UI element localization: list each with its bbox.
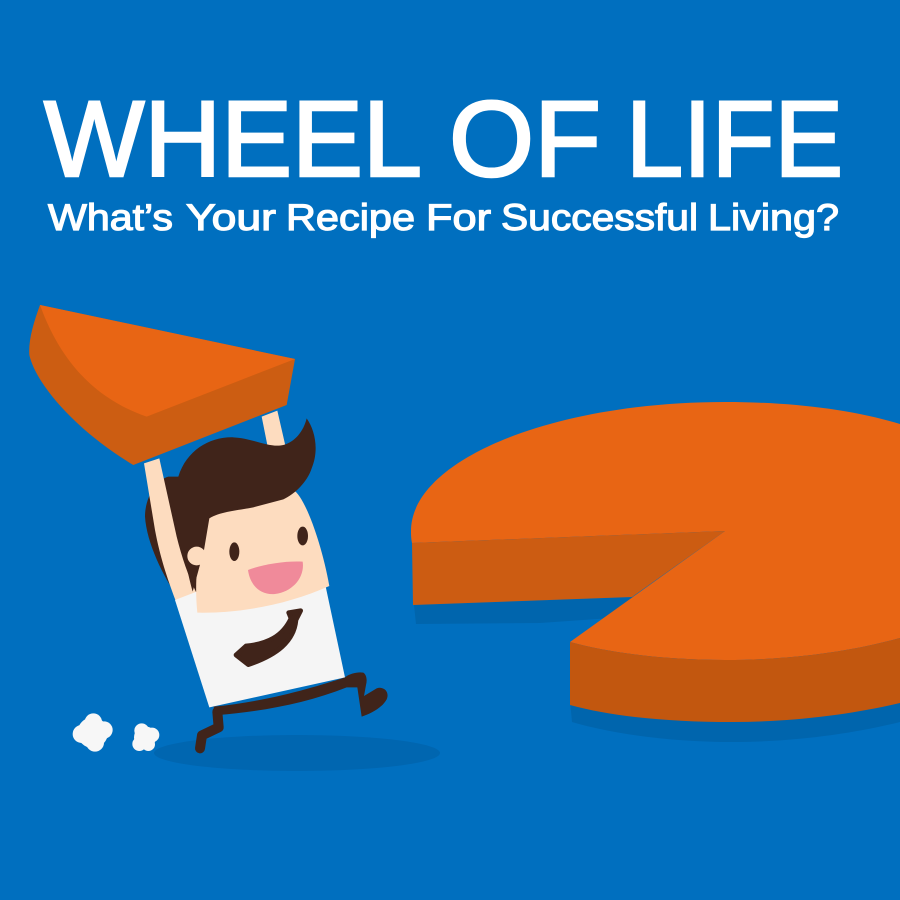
shirt [175, 583, 345, 707]
carried pie slice [29, 305, 295, 465]
title: LIFE [626, 78, 843, 199]
head [196, 490, 329, 613]
ground shadow [154, 735, 440, 771]
dust puff small [132, 723, 159, 751]
pie shadow: left section [414, 597, 634, 624]
subtitle: For [426, 197, 491, 238]
front leg [213, 672, 388, 717]
subtitle: Living? [708, 197, 839, 238]
right eye [297, 527, 308, 545]
tie [236, 611, 301, 665]
title: WHEEL [44, 78, 422, 199]
slice top face [40, 305, 295, 417]
pie front wall [570, 638, 900, 722]
title [44, 78, 843, 199]
back hair [145, 477, 203, 598]
title: OF [449, 78, 601, 199]
left eye [229, 542, 239, 561]
subtitle: Your [186, 197, 276, 238]
subtitle: Successful [501, 197, 698, 238]
subtitle [48, 197, 839, 238]
pie shadow: front section [570, 700, 900, 742]
raised arm [144, 458, 197, 602]
ear [187, 547, 206, 565]
pie chart with missing slice [411, 402, 900, 742]
hair [177, 418, 316, 592]
dust puff large [73, 713, 113, 752]
subtitle: Recipe [286, 197, 415, 238]
subtitle: What’s [48, 197, 173, 238]
back arm [262, 411, 286, 448]
pie inner cut wall [412, 531, 725, 605]
mouth [248, 561, 303, 594]
rear leg [200, 712, 219, 748]
pie top face [411, 402, 900, 660]
slice side wall [29, 305, 295, 465]
character carrying pie slice [29, 305, 388, 752]
